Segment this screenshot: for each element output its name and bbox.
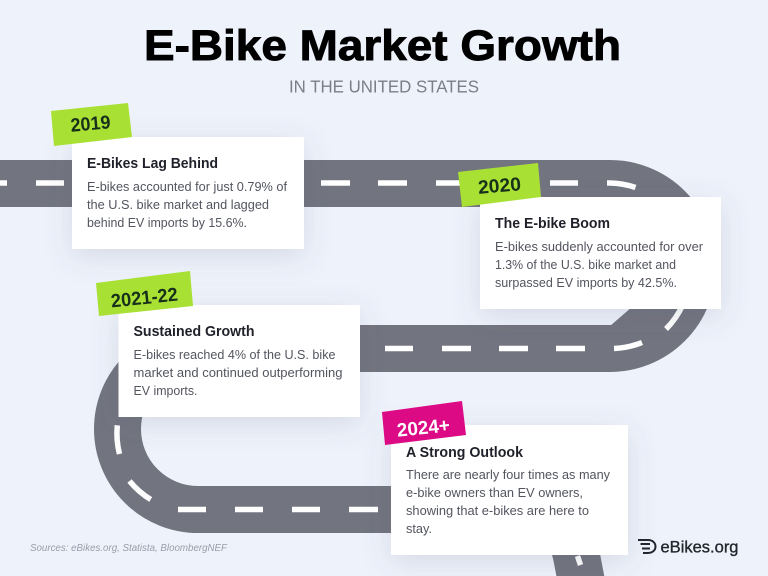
panel: 2021-22 bbox=[118, 305, 360, 417]
2021-22 body text: EV imports. bbox=[134, 383, 198, 398]
year tag: 2021-22 bbox=[96, 271, 193, 316]
2019 body text: E-bikes accounted for just 0.79% of bbox=[87, 179, 287, 194]
sources note: Sources: eBikes.org, Statista, BloombergNEF bbox=[30, 542, 228, 554]
year tag: 2019: 2019 bbox=[70, 112, 111, 137]
year tag: 2024+ bbox=[382, 401, 466, 445]
2024+ body text: e-bike owners than EV owners, bbox=[406, 485, 583, 500]
2020 body text: 1.3% of the U.S. bike market and bbox=[495, 257, 676, 272]
year tag: 2021-22: 2021-22 bbox=[110, 285, 179, 312]
winding road bbox=[0, 183, 692, 576]
2020 body text bbox=[495, 239, 704, 290]
2019 heading: E-Bikes Lag Behind bbox=[87, 155, 218, 172]
2020 heading: The E-bike Boom bbox=[495, 215, 610, 232]
2024+ body text: stay. bbox=[406, 521, 432, 536]
2021-22 body text: market and continued outperforming bbox=[134, 365, 342, 380]
2021-22 body text: E-bikes reached 4% of the U.S. bike bbox=[134, 347, 336, 362]
2024+ body text: There are nearly four times as many bbox=[406, 467, 611, 482]
year tag: 2024+: 2024+ bbox=[396, 415, 451, 442]
year tag: 2020: 2020 bbox=[477, 174, 522, 199]
icon: speed-line D bbox=[638, 540, 656, 553]
2021-22 body text bbox=[134, 347, 342, 398]
year tag: 2019 bbox=[51, 103, 132, 146]
2019 body text bbox=[87, 179, 287, 230]
panel: 2024+ bbox=[391, 425, 628, 555]
2024+ heading: A Strong Outlook bbox=[406, 444, 524, 461]
panel: 2020 bbox=[480, 197, 721, 309]
2024+ body text bbox=[406, 467, 611, 536]
year tag: 2020 bbox=[458, 163, 541, 207]
2020 body text: E-bikes suddenly accounted for over bbox=[495, 239, 704, 254]
logo: eBikes.org: eBikes.org bbox=[660, 538, 738, 556]
2020 body text: surpassed EV imports by 42.5%. bbox=[495, 275, 677, 290]
title: E-Bike Market Growth bbox=[144, 22, 621, 70]
2019 body text: behind EV imports by 15.6%. bbox=[87, 215, 247, 230]
2024+ body text: showing that e-bikes are here to bbox=[406, 503, 589, 518]
subtitle: IN THE UNITED STATES bbox=[289, 76, 479, 96]
2021-22 heading: Sustained Growth bbox=[134, 323, 254, 340]
panel: 2019 bbox=[72, 137, 304, 249]
2019 body text: the U.S. bike market and lagged bbox=[87, 197, 269, 212]
